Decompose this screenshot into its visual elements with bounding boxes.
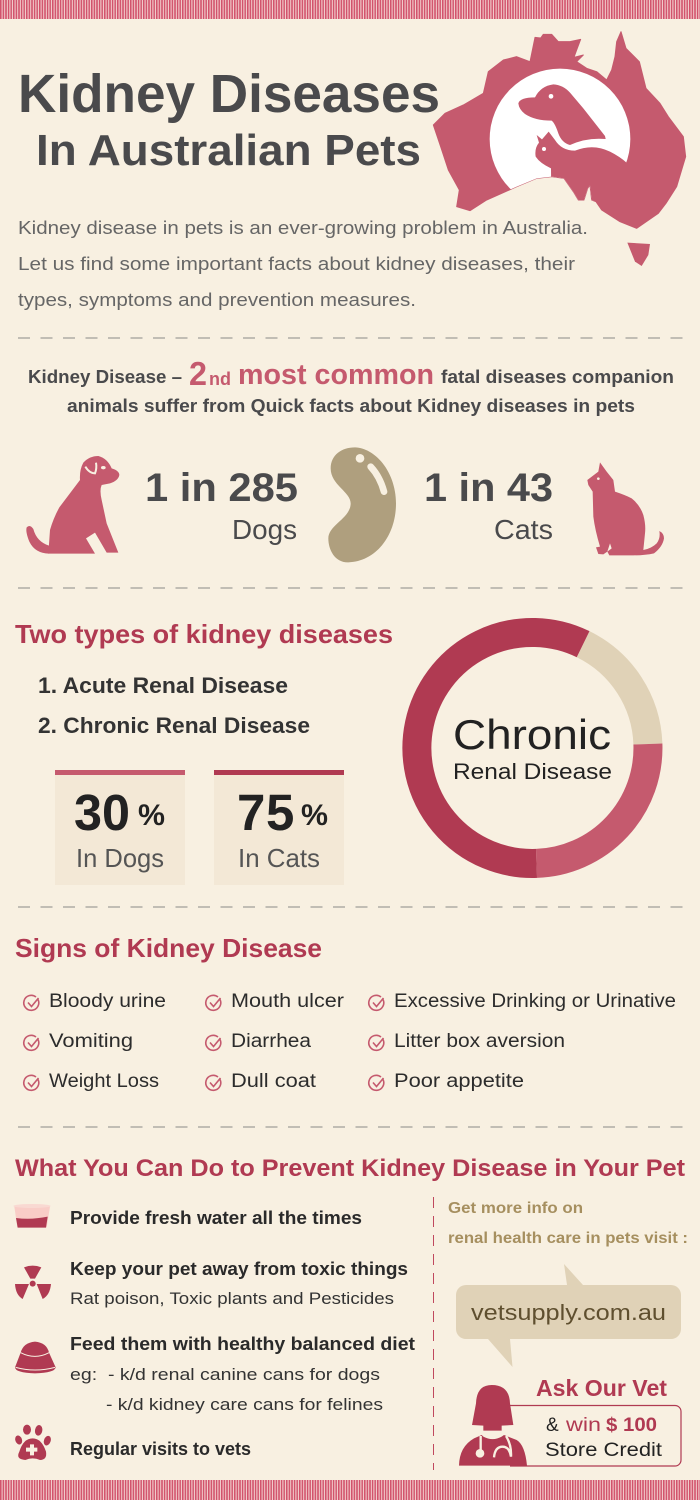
icon: radiation (15, 1266, 51, 1299)
prevention: toxic things (70, 1259, 408, 1308)
prevention: vets: Regular visits to vets (70, 1439, 251, 1459)
signs checklist: Excessive Drinking or Urinative (394, 991, 676, 1012)
speech bubble: website (456, 1264, 681, 1367)
subheading: fatal diseases companion (441, 367, 674, 387)
signs checklist: Vomiting (49, 1031, 133, 1052)
title (18, 64, 440, 175)
list of disease types: 2. Chronic Renal Disease (38, 713, 310, 738)
signs checklist: Litter box aversion (394, 1031, 565, 1052)
stat: cats (424, 466, 553, 545)
callout: ask our vet (459, 1375, 681, 1466)
callout: ask our vet: Store Credit (545, 1440, 663, 1461)
stat: cats: Cats (494, 514, 553, 545)
subheading: animals suffer from Quick facts about Kidney diseases in pets (67, 396, 635, 416)
donut chart: chronic renal disease: Chronic (453, 711, 611, 758)
prevention: diet: Feed them with healthy balanced diet (70, 1334, 415, 1354)
subheading: most common (238, 359, 434, 391)
icon: cat (587, 462, 664, 555)
icon: food bowl (15, 1342, 56, 1373)
signs checklist: Poor appetite (394, 1071, 524, 1092)
signs checklist: Weight Loss (49, 1071, 159, 1092)
prevention: toxic things: Keep your pet away from toxic things (70, 1259, 408, 1279)
stat card: cats: In Cats (238, 843, 320, 873)
heading: signs: Signs of Kidney Disease (15, 933, 322, 963)
signs checklist: Diarrhea (231, 1031, 311, 1052)
list of disease types (38, 673, 310, 738)
callout: ask our vet: Ask Our Vet (536, 1375, 667, 1401)
stat: cats: 1 in 43 (424, 466, 553, 510)
stat card: dogs: % (138, 799, 165, 832)
icon: water glass (13, 1204, 51, 1228)
stat card: cats: 75 (237, 784, 294, 841)
icon: paw with cross (14, 1424, 52, 1460)
intro text: Kidney disease in pets is an ever-growing problem in Australia. (18, 217, 588, 238)
more info text (448, 1200, 688, 1247)
stat card: dogs (55, 770, 185, 885)
title: Kidney Diseases (18, 64, 440, 124)
stat: dogs: 1 in 285 (145, 466, 298, 510)
more info text: renal health care in pets visit : (448, 1230, 688, 1247)
stat card: dogs: 30 (74, 784, 130, 841)
icon: dog (26, 456, 119, 554)
signs checklist: Bloody urine (49, 991, 166, 1012)
stat card: cats: % (301, 799, 328, 832)
intro text: types, symptoms and prevention measures. (18, 289, 416, 310)
stat: dogs (145, 466, 298, 545)
more info text: Get more info on (448, 1200, 583, 1217)
prevention: water: Provide fresh water all the times (70, 1208, 362, 1228)
subheading: Kidney Disease – (28, 367, 182, 387)
donut chart: chronic renal disease: Renal Disease (453, 759, 612, 784)
signs checklist (24, 991, 676, 1092)
stat card: cats (214, 770, 344, 885)
bottom stripe border (0, 1480, 700, 1500)
donut chart: chronic renal disease (417, 632, 648, 863)
intro text (18, 217, 588, 310)
top stripe border (0, 0, 700, 19)
intro text: Let us find some important facts about kidney diseases, their (18, 253, 575, 274)
speech bubble: website: vetsupply.com.au (471, 1300, 666, 1325)
callout: ask our vet: $ 100 (606, 1415, 657, 1436)
signs checklist: Dull coat (231, 1071, 317, 1092)
icon: vet (459, 1385, 527, 1466)
subheading: 2 (189, 355, 207, 392)
subheading (28, 355, 674, 416)
prevention: diet: eg: - k/d renal canine cans for dogs (70, 1365, 380, 1384)
icon: Australia map with dog and cat (433, 32, 686, 266)
list of disease types: 1. Acute Renal Disease (38, 673, 288, 698)
icon: kidney bean (328, 447, 396, 562)
heading: prevention: What You Can Do to Prevent Kidney Disease in Your Pet (15, 1155, 685, 1182)
signs checklist: Mouth ulcer (231, 991, 345, 1012)
stat: dogs: Dogs (232, 514, 297, 545)
subheading: nd (209, 369, 231, 389)
heading: two types: Two types of kidney diseases (15, 619, 393, 649)
stat card: dogs: In Dogs (76, 843, 164, 873)
callout: ask our vet: & (546, 1415, 559, 1436)
prevention: diet: - k/d kidney care cans for felines (106, 1395, 383, 1414)
title: In Australian Pets (36, 126, 421, 175)
prevention: toxic things: Rat poison, Toxic plants and Pesticides (70, 1289, 394, 1308)
callout: ask our vet: win (565, 1415, 601, 1436)
prevention: diet (70, 1334, 415, 1414)
